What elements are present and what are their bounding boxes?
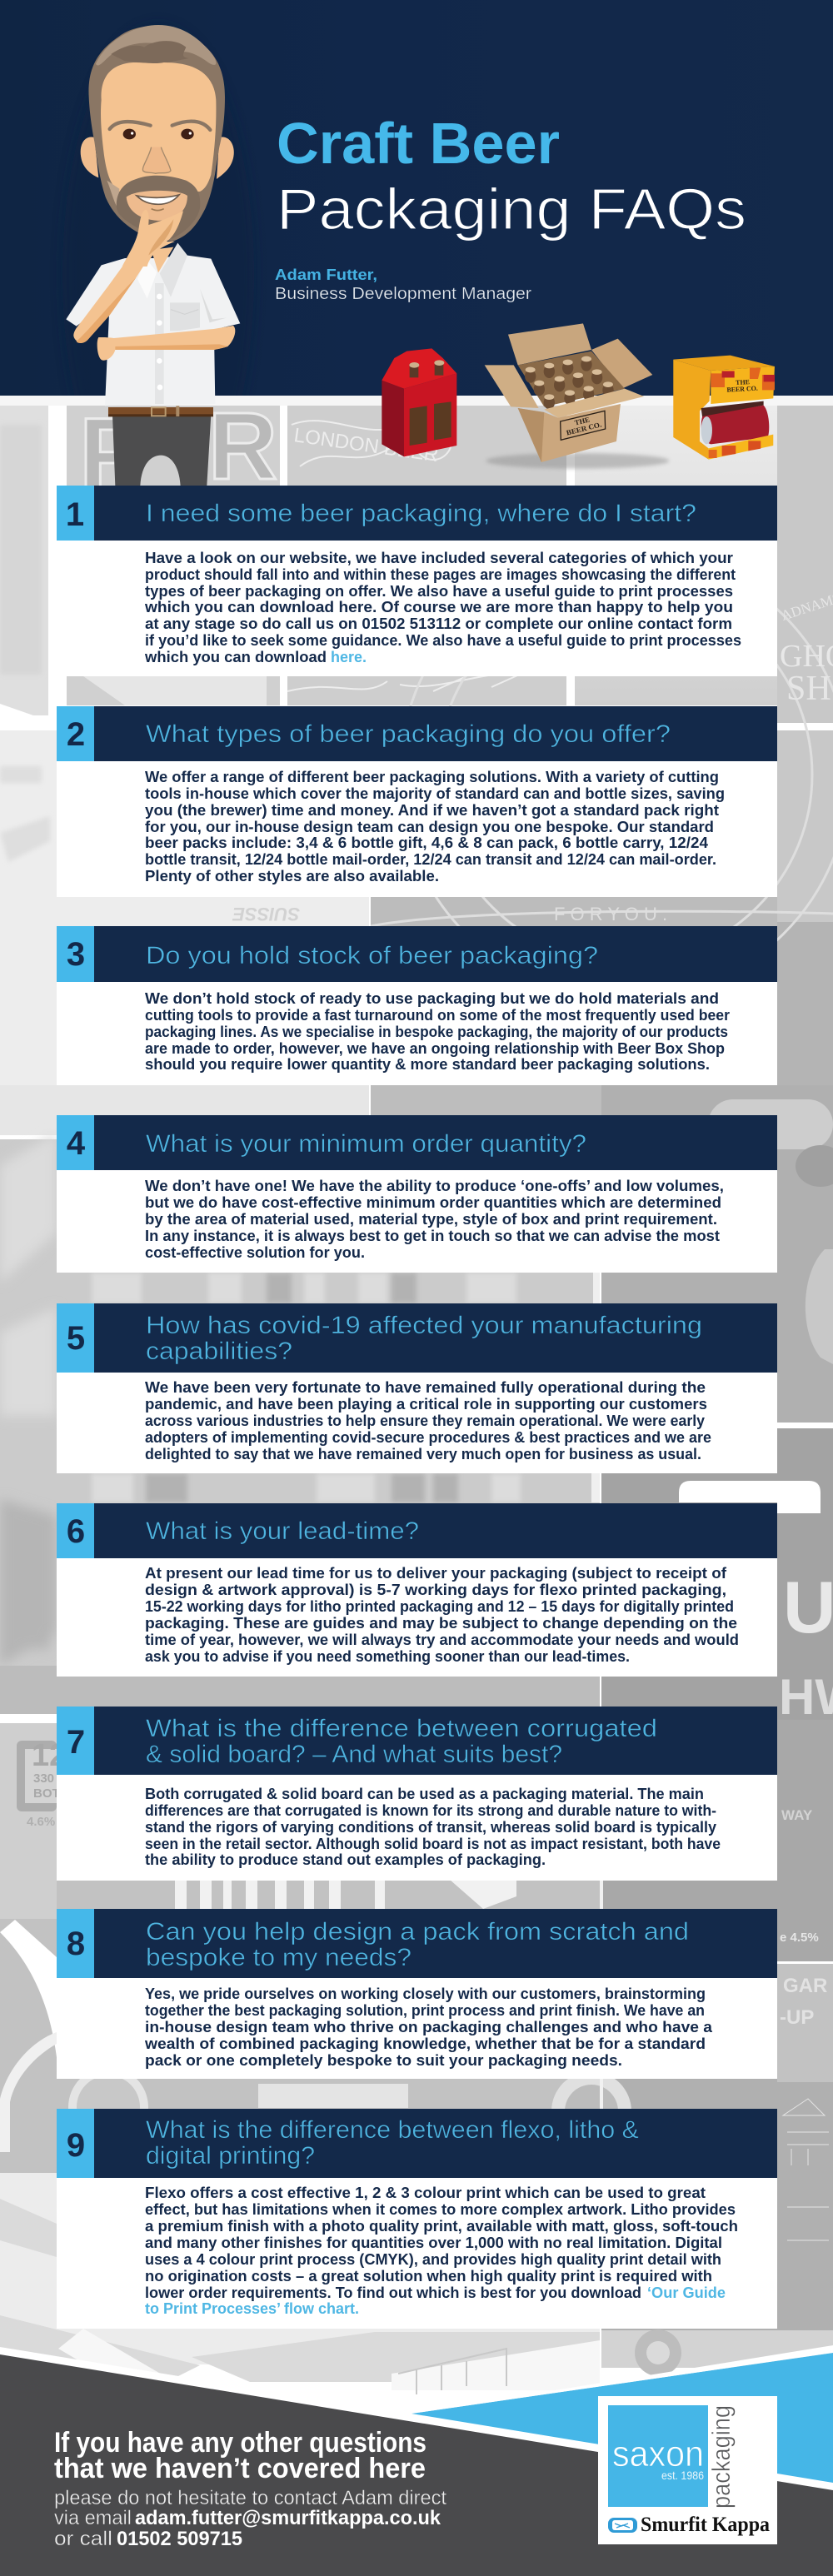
FAQ card 9: digital printing? [146, 2142, 315, 2170]
background photo collage: e 4.5% [780, 1931, 819, 1945]
FAQ card 1: 1 [66, 496, 84, 533]
FAQ card 1: Have a look on our website, we have included several categories of which your [145, 550, 733, 566]
FAQ card 2: you (the brewer) time and money. And if we haven’t got a standard pack right [145, 802, 719, 819]
FAQ card 7: differences are that corrugated is known for its strong and durable nature to with- [145, 1802, 716, 1819]
FAQ card 3: Do you hold stock of beer packaging? [146, 942, 598, 969]
FAQ card 9: no origination costs – a great solution when high quality print is required with [145, 2268, 712, 2285]
FAQ card 7 [57, 1707, 777, 1881]
author name and role: Business Development Manager [275, 285, 531, 303]
FAQ card 7: stand the rigors of varying conditions of transit, whereas solid board is typically [145, 1819, 716, 1836]
logo: Saxon Packaging / Smurfit Kappa: Smurfit Kappa [641, 2514, 770, 2536]
FAQ card 5 [57, 1303, 777, 1473]
yellow can display box: THE [736, 378, 750, 386]
background photo collage: F O R Y O U . [554, 904, 667, 924]
FAQ card 8: wealth of combined packaging knowledge, whether that be for a standard [144, 2035, 706, 2052]
FAQ card 4: We don’t have one! We have the ability to produce ‘one-offs’ and low volumes, [145, 1178, 724, 1194]
footer contact text: please do not hesitate to contact Adam direct [54, 2487, 446, 2509]
FAQ card 9: lower order requirements. To find out which is best for you download [145, 2285, 641, 2301]
title: Packaging FAQs [277, 177, 746, 242]
logo: Saxon Packaging / Smurfit Kappa: est. 1986 [661, 2469, 704, 2482]
background photo collage: 4.6% [27, 1815, 55, 1829]
FAQ card 1: at any stage so do call us on 01502 513112 or complete our online contact form [145, 615, 732, 632]
FAQ card 3: are made to order, however, we have an ongoing relationship with Beer Box Shop [145, 1040, 725, 1057]
background photo collage: BOT [33, 1786, 60, 1801]
FAQ card 7: seen in the retail sector. Although solid board is not as impact resistant, both have [145, 1836, 721, 1852]
FAQ card 8: together the best packaging solution, print process and print finish. We have an [145, 2002, 705, 2019]
FAQ card 2: Plenty of other styles are also available. [145, 868, 439, 884]
FAQ card 6: What is your lead-time? [146, 1517, 419, 1545]
FAQ card 9: to Print Processes’ flow chart. [145, 2300, 359, 2317]
FAQ card 5: across various industries to help ensure they remain operational. We were early [145, 1413, 705, 1429]
FAQ card 5: How has covid-19 affected your manufacturing [146, 1312, 702, 1339]
FAQ card 8: 8 [67, 1926, 85, 1962]
FAQ card 4: cost-effective solution for you. [145, 1244, 365, 1261]
logo: Saxon Packaging / Smurfit Kappa: saxon [612, 2434, 704, 2474]
FAQ card 5: pandemic, and have been playing a critical role in supporting our customers [145, 1396, 707, 1413]
FAQ card 3: should you require lower quantity & more standard beer packaging solutions. [145, 1056, 710, 1073]
background photo collage: P [79, 397, 146, 509]
background photo collage: GAR [783, 1975, 827, 1997]
FAQ card 9 [57, 2109, 777, 2329]
FAQ card 4: but we do have cost-effective minimum order quantities which are determined [145, 1194, 721, 1211]
corrugated transit box [485, 323, 652, 462]
FAQ card 4: What is your minimum order quantity? [146, 1130, 586, 1158]
FAQ card 7: What is the difference between corrugated [146, 1715, 657, 1742]
FAQ card 6: ask you to advise if you need something sooner than our lead-times. [145, 1648, 630, 1665]
FAQ card 7: 7 [67, 1724, 85, 1761]
FAQ card 9: 9 [67, 2127, 85, 2164]
illustration: Adam Futter cartoon figure [66, 25, 240, 486]
FAQ card 7: Both corrugated & solid board can be used as a packaging material. The main [145, 1786, 704, 1802]
footer contact text: 01502 509715 [117, 2528, 242, 2550]
author name and role [275, 267, 531, 303]
FAQ card 9: a premium finish with a photo quality print, available with matt, gloss, soft-touch [145, 2218, 738, 2235]
logo: Saxon Packaging / Smurfit Kappa: packaging [706, 2405, 736, 2509]
FAQ card 2 [57, 706, 777, 897]
FAQ card 5: adopters of implementing covid-secure procedures & best practices and we are [145, 1429, 711, 1446]
background photo collage [0, 393, 833, 2412]
FAQ card 4: 4 [67, 1125, 86, 1162]
FAQ card 1: here. [331, 649, 367, 665]
FAQ card 6: At present our lead time for us to deliver your packaging (subject to receipt of [145, 1565, 727, 1582]
footer contact text: or call [54, 2528, 112, 2550]
FAQ card 4: by the area of material used, material type, style of box and print requirement. [145, 1211, 717, 1228]
FAQ card 8: in-house design team who thrive on packaging challenges and who have a [145, 2019, 713, 2035]
figure body [66, 242, 240, 486]
FAQ card 1 [57, 486, 777, 676]
background photo collage: 12 [32, 1738, 67, 1773]
FAQ card 7: the ability to produce stand out examples of packaging. [145, 1851, 546, 1868]
FAQ card 3: cutting tools to provide a fast turnaround on some of the most frequently used beer [145, 1007, 730, 1024]
footer contact text: that we haven’t covered here [54, 2453, 426, 2484]
FAQ card 8: bespoke to my needs? [146, 1944, 412, 1971]
FAQ card 1: I need some beer packaging, where do I start? [146, 500, 696, 527]
FAQ card 8: Can you help design a pack from scratch and [146, 1918, 689, 1946]
background photo collage: LONDON BEER [292, 424, 440, 466]
yellow can display box [673, 356, 775, 460]
corrugated transit box: BEER CO. [566, 420, 602, 437]
FAQ card 9: uses a 4 colour print process (CMYK), and provides high quality print detail with [145, 2251, 721, 2268]
background photo collage: R [208, 393, 277, 500]
FAQ card 1: if you’d like to seek some guidance. We also have a useful guide to print processes [145, 632, 741, 649]
FAQ card 3 [57, 926, 777, 1085]
FAQ card 9: effect, but has limitations when it comes to more complex artwork. Litho provides [145, 2201, 736, 2218]
FAQ card 2: 2 [67, 716, 85, 753]
background photo collage: SH [786, 670, 831, 708]
FAQ card 9: What is the difference between flexo, litho & [146, 2116, 639, 2144]
FAQ card 9: Flexo offers a cost effective 1, 2 & 3 colour print which can be used to great [145, 2185, 706, 2201]
figure head [81, 25, 234, 267]
FAQ card 5: We have been very fortunate to have remained fully operational during the [145, 1379, 706, 1396]
logo: Saxon Packaging / Smurfit Kappa [598, 2396, 777, 2544]
FAQ card 5: delighted to say that we have remained very much open for business as usual. [145, 1446, 701, 1462]
header panel [0, 0, 833, 406]
title [277, 111, 746, 242]
footer contact text: adam.futter@smurfitkappa.co.uk [135, 2507, 441, 2529]
FAQ card 6: time of year, however, we will always try and accommodate your needs and would [145, 1632, 739, 1648]
yellow can display box: BEER CO. [726, 385, 758, 394]
FAQ card 8: pack or one completely bespoke to suit your packaging needs. [145, 2052, 622, 2069]
title: Craft Beer [277, 111, 560, 176]
FAQ card 3: packaging lines. As we specialise in bespoke packaging, the majority of our products [145, 1024, 728, 1040]
FAQ card 5: capabilities? [146, 1338, 292, 1365]
FAQ card 6 [57, 1503, 777, 1677]
FAQ card 6: 6 [67, 1513, 85, 1550]
illustration: product boxes [382, 323, 775, 469]
FAQ card 1: types of beer packaging on offer. We also have a useful guide to print processes [145, 583, 733, 600]
corrugated transit box: THE [574, 415, 591, 427]
FAQ card 2: What types of beer packaging do you offer? [146, 720, 671, 748]
FAQ card 4: In any instance, it is always best to get in touch so that we can advise the most [145, 1228, 720, 1244]
FAQ card 1: which you can download [144, 649, 327, 665]
FAQ card 2: tools in-house which cover the majority of standard can and bottle sizes, saving [145, 785, 725, 802]
FAQ card 1: product should fall into and within these pages are images showcasing the different [145, 566, 736, 583]
red bottle carrier [382, 348, 456, 456]
footer contact text [54, 2427, 446, 2550]
FAQ card 6: 15-22 working days for litho printed packaging and 12 – 15 days for digitally printed [145, 1598, 734, 1615]
author name and role: Adam Futter, [275, 267, 377, 283]
FAQ card 8 [57, 1909, 777, 2079]
FAQ card 4 [57, 1115, 777, 1273]
footer contact text: via email [54, 2507, 132, 2529]
background photo collage: WAY [781, 1807, 813, 1823]
FAQ card 1: which you can download here. Of course we are more than happy to help you [144, 599, 733, 615]
FAQ card 7: & solid board? – And what suits best? [146, 1741, 562, 1768]
FAQ card 6: design & artwork approval) is 5-7 working days for flexo printed packaging, [145, 1582, 726, 1598]
FAQ card 2: bottle transit, 12/24 bottle mail-order, 12/24 can transit and 12/24 can mail-order. [145, 851, 716, 868]
background photo collage: -UP [780, 2006, 814, 2029]
FAQ card 2: We offer a range of different beer packaging solutions. With a variety of cutting [145, 769, 719, 785]
FAQ card 9: and many other finishes for quantities over 1,000 with no real limitation. Digital [145, 2235, 722, 2251]
FAQ card 2: for you, our in-house design team can design you one bespoke. Our standard [145, 819, 714, 835]
FAQ card 2: beer packs include: 3,4 & 6 bottle gift, 4,6 & 8 can pack, 6 bottle carry, 12/24 [145, 835, 708, 851]
FAQ card 3: 3 [67, 936, 85, 973]
FAQ card 3: We don’t hold stock of ready to use packaging but we do hold materials and [145, 990, 719, 1007]
FAQ card 8: Yes, we pride ourselves on working closely with our customers, brainstorming [145, 1986, 706, 2002]
FAQ card 9: ‘Our Guide [647, 2285, 726, 2301]
background photo collage: SUISSE [232, 904, 300, 924]
background photo collage: 330 [33, 1771, 54, 1786]
FAQ card 6: packaging. These are guides and may be subject to change depending on the [145, 1615, 737, 1632]
footer contact text: If you have any other questions [54, 2427, 426, 2459]
footer panel [0, 2345, 833, 2576]
FAQ card 5: 5 [67, 1320, 85, 1357]
